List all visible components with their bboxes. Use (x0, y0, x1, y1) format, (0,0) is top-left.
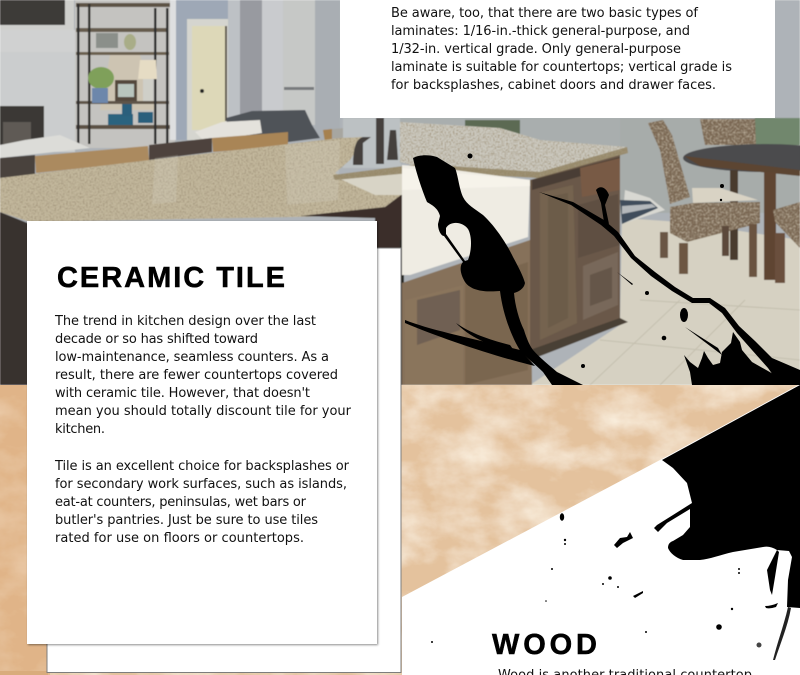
background photo: kitchen (0, 0, 800, 385)
heading: ceramic tile: CERAMIC TILE (57, 262, 285, 294)
main granite counter (0, 137, 410, 222)
ceramic tile body text: decade or so has shifted toward (55, 332, 258, 347)
white diagonal panel (402, 384, 800, 675)
fireplace and television (0, 0, 80, 152)
ceramic tile body text: butler's pantries. Just be sure to use tiles (55, 513, 318, 528)
farmhouse sink (402, 165, 530, 275)
panel: ceramic tile card (27, 221, 377, 644)
ceramic tile body text: with ceramic tile. However, that doesn't (55, 386, 310, 401)
island counter (400, 122, 627, 175)
laminate body text: laminates: 1/16-in.-thick general-purpose, and (391, 24, 690, 39)
bar stool backs (0, 118, 401, 178)
marble strip beneath ceramic cards (0, 671, 48, 675)
ceramic tile body text: Tile is an excellent choice for backsplashes or (54, 459, 350, 474)
ceramic tile body text: low-maintenance, seamless counters. As a (55, 350, 329, 365)
laminate body text: 1/32-in. vertical grade. Only general-purpose (391, 42, 681, 57)
ceramic tile body text: rated for use on floors or countertops. (55, 531, 304, 546)
marble background lower section (0, 385, 800, 675)
panel: laminate text card (340, 0, 775, 118)
shelving unit (75, 0, 175, 148)
counter reflections (152, 140, 340, 205)
sofa cushions and pillows (0, 110, 320, 158)
laminate body text: for backsplashes, cabinet doors and drawer faces. (391, 78, 716, 93)
ceramic tile body text: for secondary work surfaces, such as islands, (55, 477, 347, 492)
ink splatter: kitchen photo (405, 154, 800, 385)
faucet (353, 118, 398, 165)
ink splatter: wood section (431, 385, 800, 660)
ceramic tile body text: result, there are fewer countertops covered (55, 368, 338, 383)
laminate body text: Be aware, too, that there are two basic types of (391, 6, 698, 21)
ceramic tile body text: The trend in kitchen design over the last (54, 314, 316, 329)
laminate body text: laminate is suitable for countertops; vertical grade is (391, 60, 732, 75)
laminate body text (391, 6, 732, 93)
ceramic tile body text: eat-at counters, peninsulas, wet bars or (55, 495, 307, 510)
far wall and floor (400, 118, 800, 385)
panel: back card behind ceramic tile (47, 248, 401, 672)
wooden cabinets (402, 155, 628, 385)
hallway wall and door (170, 0, 340, 140)
ceramic tile body text: kitchen. (55, 422, 105, 437)
heading: wood: WOOD (492, 629, 597, 661)
dark cabinet under main counter (0, 212, 30, 385)
ceramic tile body text: mean you should totally discount tile for your (55, 404, 352, 419)
dining chairs and table (648, 119, 800, 283)
ceramic tile body text (54, 314, 352, 546)
